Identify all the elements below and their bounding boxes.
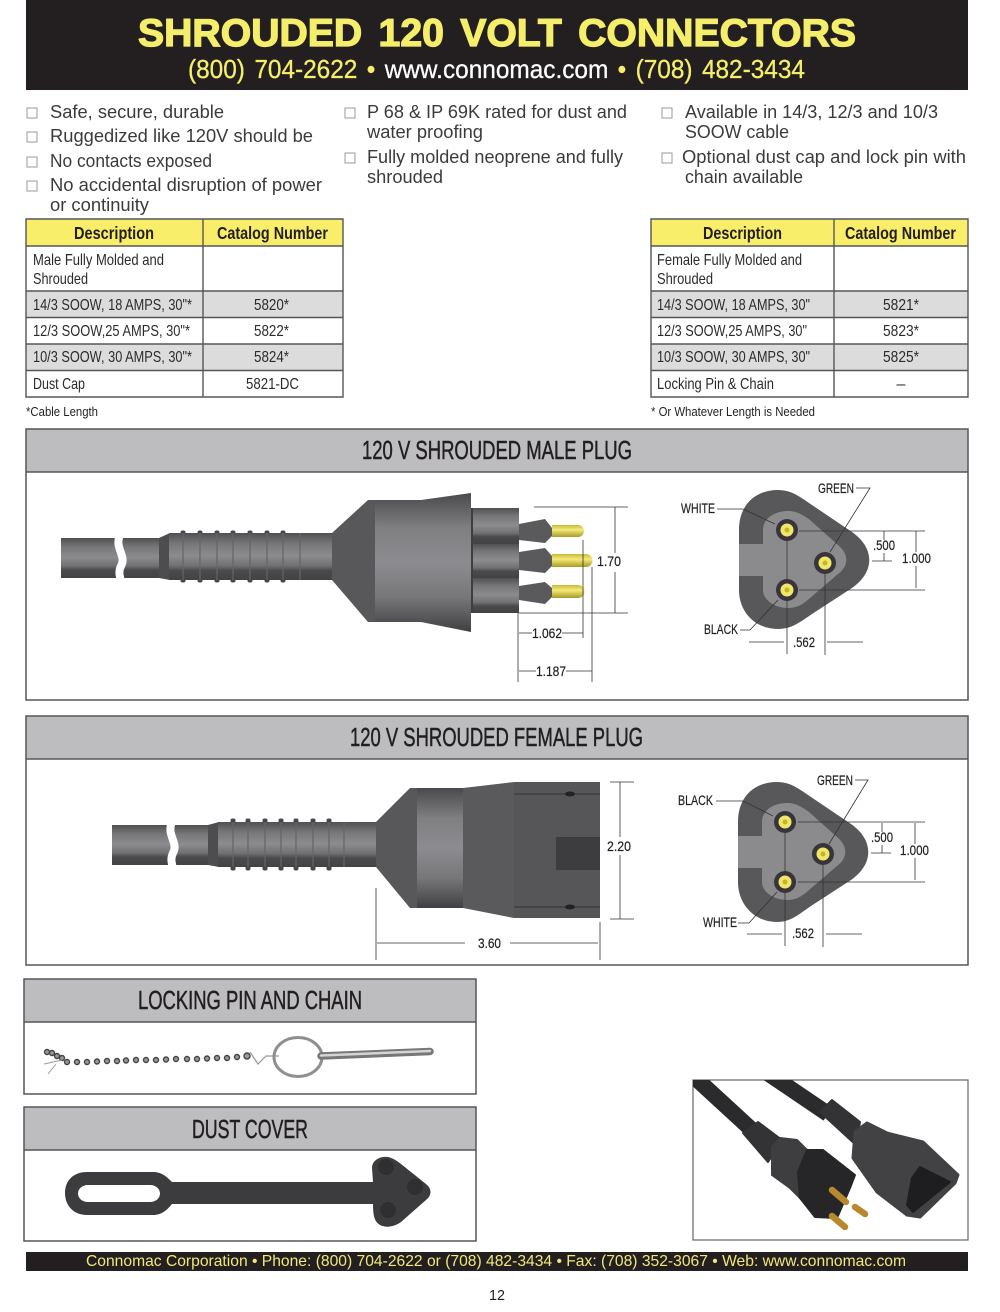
feature list: column 1	[27, 102, 322, 215]
feature list: column 3	[662, 102, 966, 187]
feature list: column 2	[345, 102, 627, 187]
panel: locking pin and chain	[24, 979, 476, 1094]
female plug dimensions: 3.60	[478, 935, 501, 951]
feature list: column 2: water proofing	[366, 122, 483, 142]
table: male catalog numbers: 5822*	[254, 323, 289, 340]
table: male catalog numbers: 14/3 SOOW, 18 AMPS, 30"*	[33, 297, 192, 314]
female plug dimensions: 2.20	[607, 838, 631, 854]
panel: female plug	[26, 716, 968, 965]
footnote: cable length: *Cable Length	[26, 404, 98, 419]
female pin face diagram	[678, 772, 929, 947]
male pin face diagram: .562	[793, 634, 815, 650]
male pin face diagram: 1.000	[902, 550, 931, 566]
male pin face diagram: GREEN	[818, 480, 854, 496]
table: female catalog numbers: 5823*	[883, 323, 919, 340]
table: male catalog numbers	[26, 219, 343, 397]
table: female catalog numbers	[651, 219, 968, 397]
table: female catalog numbers: 5825*	[883, 349, 919, 366]
feature list: column 1: Ruggedized like 120V should be	[50, 126, 313, 146]
feature list: column 3: Available in 14/3, 12/3 and 10/3	[685, 102, 938, 122]
heading: dust cover: DUST COVER	[192, 1114, 308, 1144]
heading: locking pin: LOCKING PIN AND CHAIN	[138, 985, 362, 1015]
feature list: column 1: or continuity	[50, 195, 149, 215]
male plug dimensions	[518, 507, 628, 682]
feature list: column 2: Fully molded neoprene and fully	[367, 147, 623, 167]
heading: male plug: 120 V SHROUDED MALE PLUG	[362, 435, 632, 465]
table: male catalog numbers: 10/3 SOOW, 30 AMPS, 30"*	[33, 349, 192, 366]
table: female catalog numbers: 12/3 SOOW,25 AMPS, 30"	[657, 323, 807, 340]
table: male catalog numbers: 5824*	[254, 349, 289, 366]
female pin face diagram: GREEN	[817, 772, 853, 788]
feature list: column 3: Optional dust cap and lock pin with	[682, 147, 966, 167]
feature list: column 1: No accidental disruption of power	[50, 175, 322, 195]
page number: 12	[489, 1287, 505, 1304]
contact line: (800) 704-2622 • www.connomac.com • (708) 482-3434	[188, 54, 805, 84]
feature list: column 2: shrouded	[367, 167, 443, 187]
header banner	[26, 0, 968, 90]
table: female catalog numbers: Female Fully Molded and	[657, 252, 802, 269]
table: male catalog numbers: 5821-DC	[246, 376, 299, 393]
female plug dimensions	[376, 782, 634, 960]
footnote: whatever length: * Or Whatever Length is Needed	[651, 404, 815, 419]
table: male catalog numbers: 5820*	[254, 297, 289, 314]
male plug dimensions: 1.70	[597, 553, 621, 569]
table: female catalog numbers: 5821*	[883, 297, 919, 314]
panel: male plug	[26, 429, 968, 700]
footer bar: Connomac Corporation • Phone: (800) 704-2622 or (708) 482-3434 • Fax: (708) 352-3067 • Web: www.connomac.com	[86, 1253, 906, 1270]
table: female catalog numbers: 10/3 SOOW, 30 AMPS, 30"	[657, 349, 810, 366]
table: female catalog numbers: –	[897, 376, 906, 393]
male pin face diagram: BLACK	[704, 621, 738, 637]
female pin face diagram: .500	[871, 829, 893, 845]
table: female catalog numbers: Locking Pin & Chain	[657, 376, 774, 393]
feature list: column 1: No contacts exposed	[50, 151, 212, 171]
photo: molded connectors	[690, 1072, 968, 1240]
table: female catalog numbers: Description	[703, 223, 782, 243]
feature list: column 2: P 68 & IP 69K rated for dust and	[367, 102, 627, 122]
male plug side view	[61, 493, 592, 632]
male plug dimensions: 1.062	[532, 625, 562, 641]
icon: ball chain, ring and pin	[44, 1038, 430, 1076]
title: SHROUDED 120 VOLT CONNECTORS	[138, 12, 856, 55]
table: male catalog numbers: 12/3 SOOW,25 AMPS, 30"*	[33, 323, 190, 340]
table: female catalog numbers: 14/3 SOOW, 18 AMPS, 30"	[657, 297, 810, 314]
feature list: column 3: chain available	[685, 167, 803, 187]
female pin face diagram: BLACK	[678, 792, 713, 808]
female pin face diagram: WHITE	[703, 914, 737, 930]
feature list: column 1: Safe, secure, durable	[50, 102, 224, 122]
icon: dust cover strap	[65, 1157, 430, 1227]
female pin face diagram: .562	[792, 925, 814, 941]
table: male catalog numbers: Description	[74, 223, 154, 243]
panel: dust cover	[24, 1107, 476, 1241]
feature list: column 3: SOOW cable	[685, 122, 789, 142]
male pin face diagram: .500	[873, 537, 895, 553]
table: male catalog numbers: Male Fully Molded and	[33, 252, 164, 269]
table: male catalog numbers: Shrouded	[33, 271, 88, 288]
female pin face diagram: 1.000	[900, 842, 929, 858]
table: male catalog numbers: Catalog Number	[217, 223, 328, 243]
male pin face diagram	[681, 480, 931, 655]
table: female catalog numbers: Catalog Number	[845, 223, 956, 243]
female plug side view	[112, 782, 600, 918]
heading: female plug: 120 V SHROUDED FEMALE PLUG	[350, 722, 643, 752]
male plug dimensions: 1.187	[536, 663, 566, 679]
table: male catalog numbers: Dust Cap	[33, 376, 85, 393]
table: female catalog numbers: Shrouded	[657, 271, 713, 288]
male pin face diagram: WHITE	[681, 500, 715, 516]
